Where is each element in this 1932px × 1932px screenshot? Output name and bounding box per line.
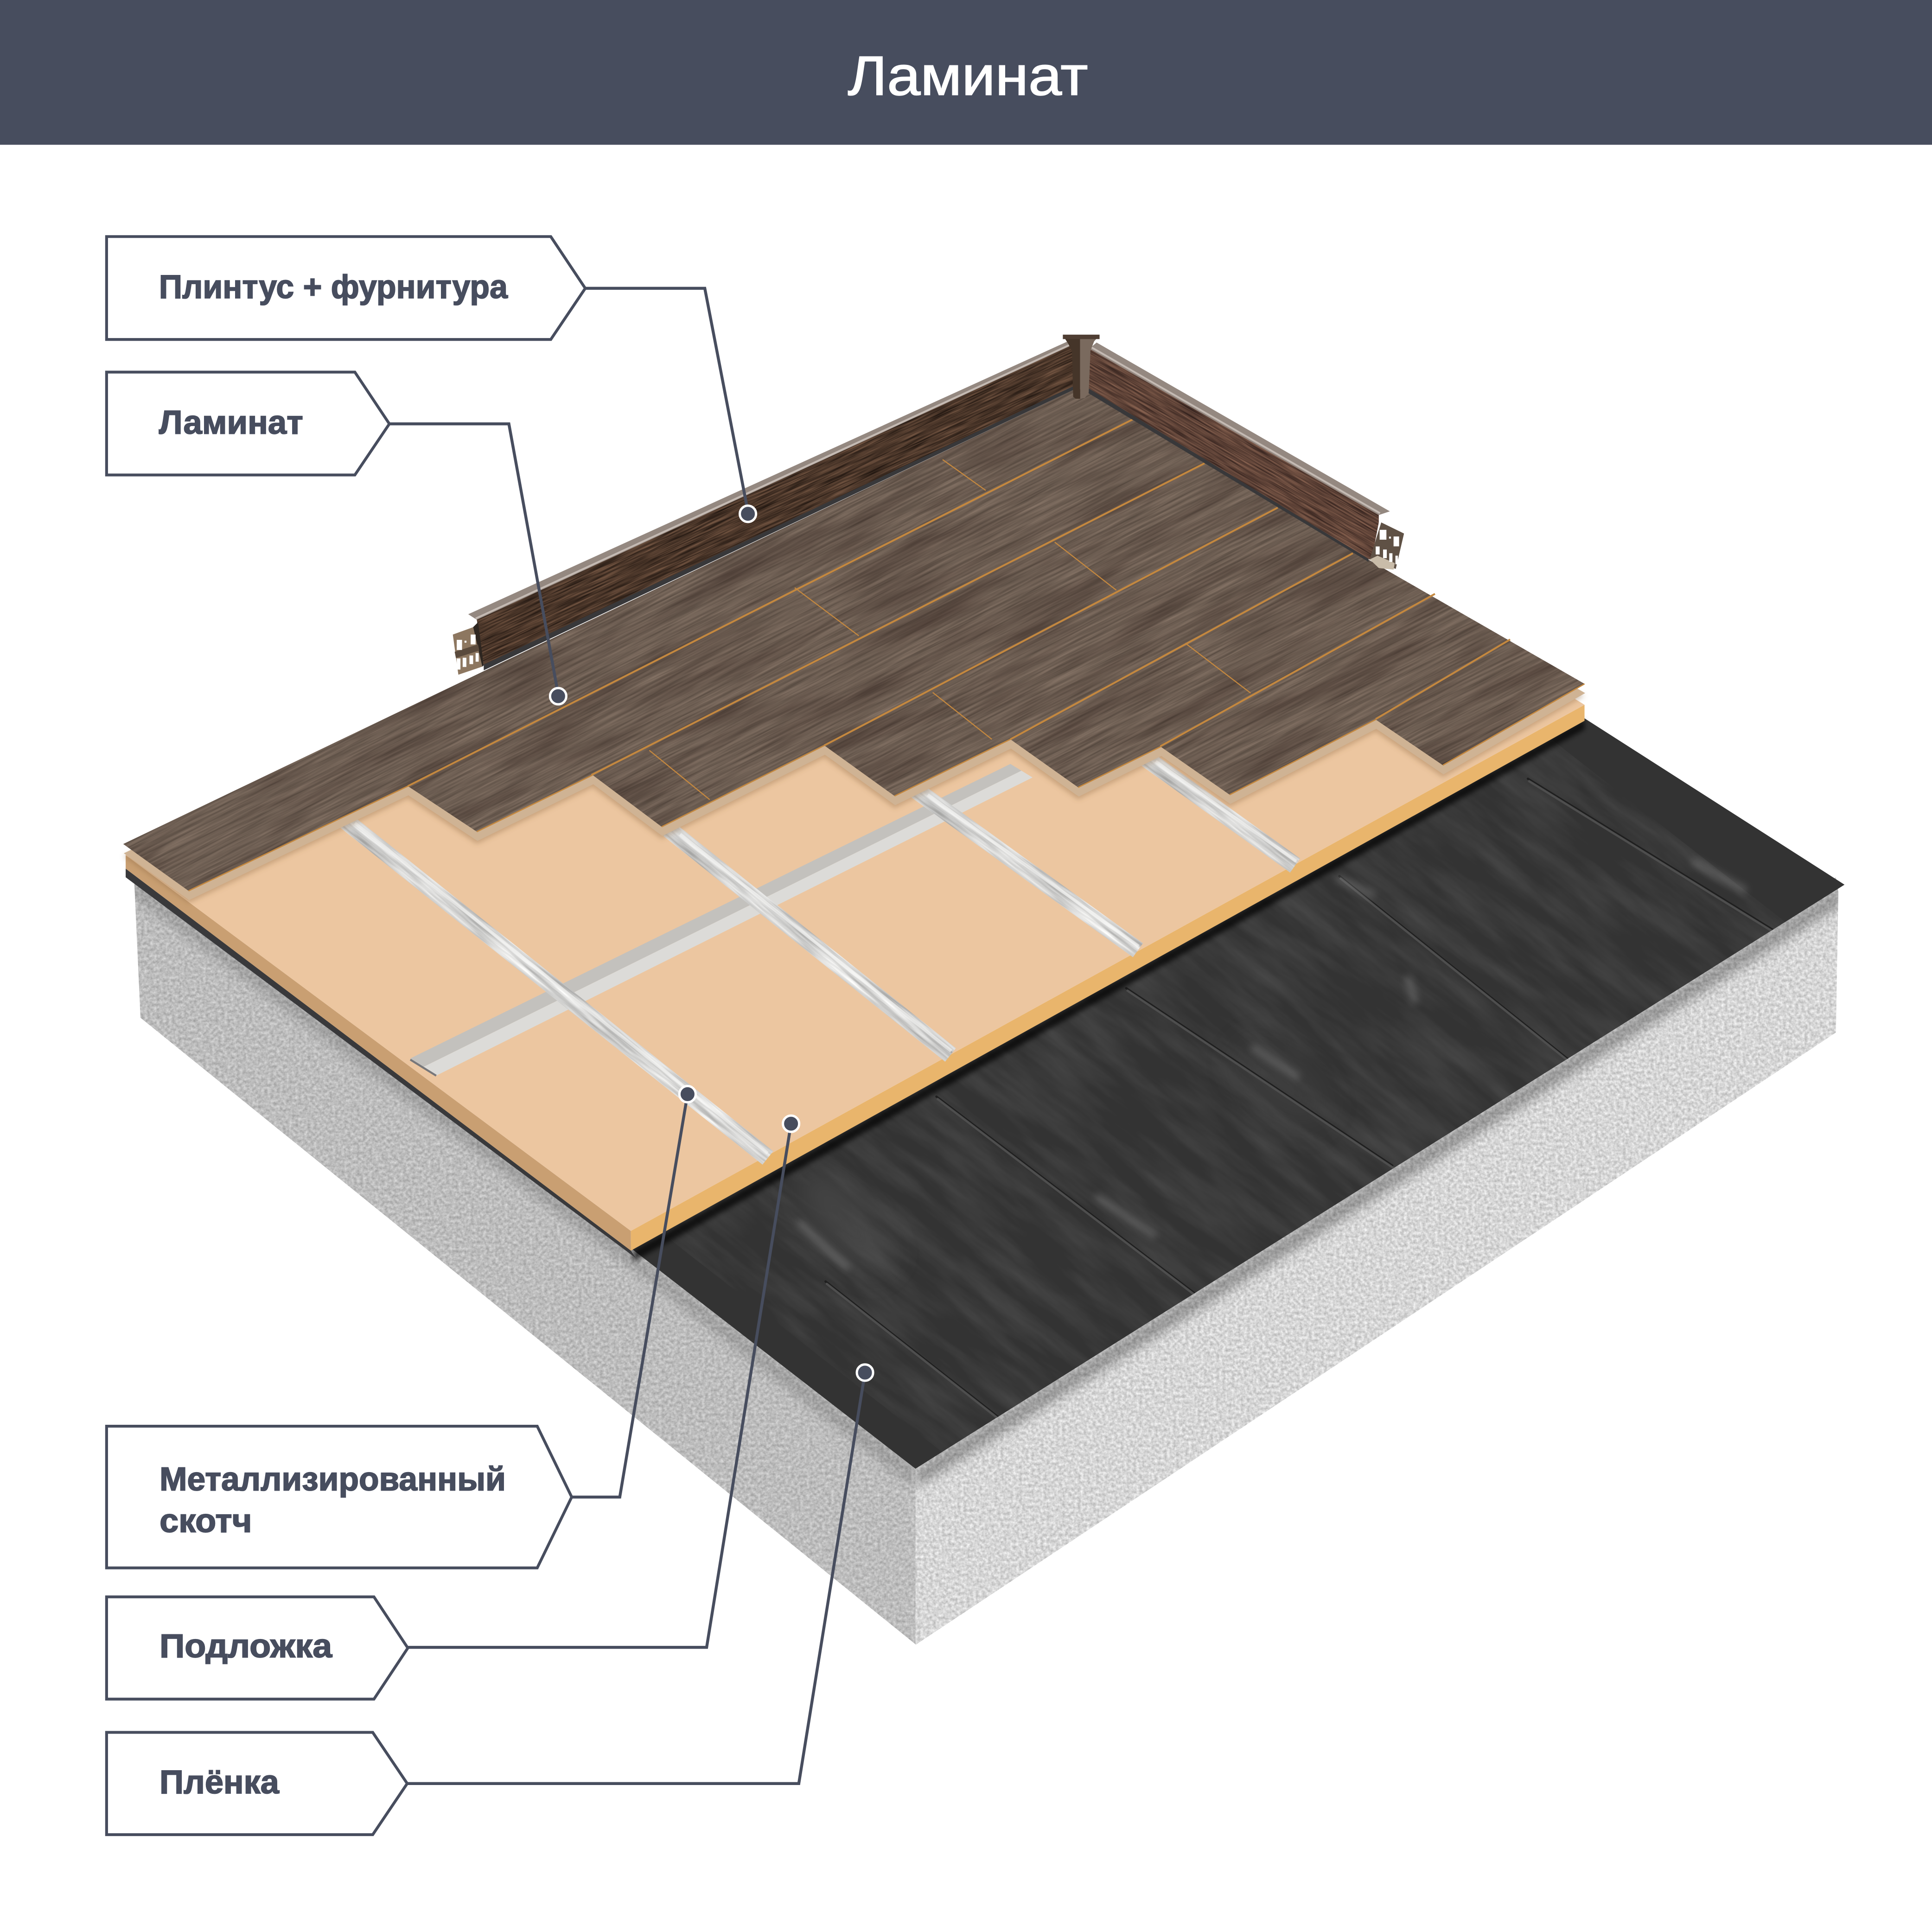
underlay dark base strip [126, 869, 636, 1258]
callout: laminate [107, 372, 557, 688]
concrete slab [111, 862, 1855, 1664]
laminate edge shadow [123, 407, 1585, 903]
cross tape [410, 764, 1033, 1076]
title: Ламинат [848, 45, 1088, 107]
concrete left face [111, 862, 937, 1664]
tape strip 4 [1139, 750, 1300, 873]
layered floor illustration [122, 335, 1844, 1645]
metallized tape strips [337, 750, 1300, 1165]
marker dots [550, 506, 873, 1381]
tape strip 3 [911, 783, 1143, 957]
laminate backing edge [124, 399, 1585, 900]
baseboard left run [366, 244, 1186, 766]
corner fitting [1063, 335, 1100, 399]
board seams [189, 419, 1585, 891]
callout: metallized tape [107, 1094, 688, 1568]
underlay top surface [126, 394, 1585, 1231]
underlay left side [126, 855, 631, 1250]
callout: underlay: Подложка [159, 1627, 332, 1664]
callout: metallized tape: скотч [159, 1503, 252, 1540]
callout: baseboard [107, 236, 746, 505]
film wrinkles and seams [686, 749, 1779, 1438]
underlay layer [126, 394, 1585, 1258]
baseboard right run [957, 226, 1507, 686]
callout: film: Плёнка [159, 1764, 280, 1801]
baseboard shadow lines [484, 386, 1369, 670]
callout: film [107, 1372, 865, 1835]
left end clip [453, 622, 484, 675]
callout: laminate: Ламинат [159, 404, 303, 441]
concrete right face [905, 869, 1855, 1664]
tape strip 1 [337, 811, 773, 1165]
underlay right side [631, 705, 1585, 1250]
callout: baseboard: Плинтус + фурнитура [159, 268, 508, 306]
baseboard with fittings [366, 226, 1507, 766]
callout: metallized tape: Металлизированный [159, 1460, 506, 1498]
right end clip [1370, 523, 1404, 570]
header bar [0, 0, 1932, 145]
callout: underlay [107, 1124, 791, 1699]
film layer [630, 718, 1844, 1469]
tape strip 2 [663, 823, 956, 1062]
